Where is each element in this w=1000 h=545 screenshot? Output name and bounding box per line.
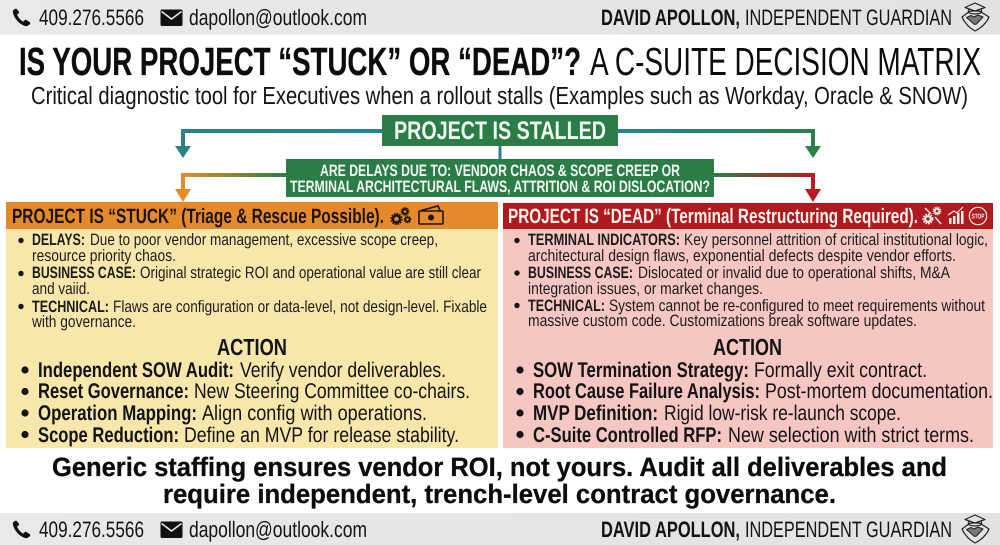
dead action list: MVP Definition: — [533, 401, 658, 425]
icon: guardian handshake — [962, 3, 989, 31]
icon: gears — [391, 208, 411, 224]
footer icon: envelope — [160, 522, 182, 538]
dead action list — [516, 358, 993, 447]
stuck action list: Independent SOW Audit: — [38, 358, 234, 382]
dead diagnostic bullets: Dislocated or invalid due to operational shifts, M&A — [638, 264, 950, 282]
stuck diagnostic bullets: with governance. — [31, 313, 136, 331]
arrow: stalled to stuck branch — [175, 131, 382, 158]
decision box: question: TERMINAL ARCHITECTURAL FLAWS, ATTRITION & ROI DISLOCATION? — [290, 178, 710, 196]
footer phone number: 409.276.5566 — [39, 517, 144, 542]
stuck action list: Operation Mapping: — [38, 401, 197, 425]
header contact bar — [0, 0, 1000, 34]
decision box: project is stalled: PROJECT IS STALLED — [394, 117, 606, 145]
stuck action list — [21, 358, 470, 447]
author name: DAVID APOLLON, — [601, 5, 740, 30]
icon: stop sign — [969, 207, 987, 225]
icon: stop sign: STOP — [972, 214, 985, 220]
arrow: stalled to question connector — [498, 146, 502, 159]
closing statement — [52, 452, 947, 509]
stuck diagnostic bullets: and vaiid. — [32, 280, 90, 298]
stuck action list: Define an MVP for release stability. — [184, 423, 459, 447]
stuck diagnostic bullets: Original strategic ROI and operational value are still clear — [140, 264, 481, 282]
icon: declining chart — [948, 207, 964, 224]
dead diagnostic bullets — [514, 231, 988, 330]
stuck header band: PROJECT IS “STUCK” (Triage & Rescue Possible). — [12, 205, 384, 228]
arrow: stalled to dead branch — [618, 131, 821, 158]
title: IS YOUR PROJECT “STUCK” OR “DEAD”? — [19, 40, 581, 84]
stuck action list: Align config with operations. — [202, 401, 427, 425]
decision box: question: ARE DELAYS DUE TO: VENDOR CHAOS & SCOPE CREEP OR — [320, 162, 680, 180]
stuck diagnostic bullets: DELAYS: — [32, 231, 85, 249]
icon: envelope — [160, 10, 182, 26]
stuck action list: Verify vendor deliverables. — [240, 358, 446, 382]
icon: money — [419, 206, 443, 224]
stuck action heading: ACTION — [217, 334, 287, 360]
dead diagnostic bullets: integration issues, or market changes. — [528, 280, 763, 298]
dead diagnostic bullets: massive custom code. Customizations break software updates. — [528, 312, 917, 330]
stuck action list: New Steering Committee co-chairs. — [194, 379, 470, 403]
closing statement: require independent, trench-level contract governance. — [163, 479, 836, 509]
dead action list: C-Suite Controlled RFP: — [533, 423, 722, 447]
decision box: question — [286, 159, 714, 197]
panel: project is dead — [503, 203, 993, 448]
stuck diagnostic bullets — [18, 231, 487, 331]
stuck action list: Reset Governance: — [38, 379, 189, 403]
stuck diagnostic bullets: Flaws are configuration or data-level, not design-level. Fixable — [113, 298, 487, 316]
stuck diagnostic bullets: Due to poor vendor management, excessive scope creep, — [90, 231, 438, 249]
arrow: question to dead panel — [714, 175, 821, 202]
dead diagnostic bullets: TECHNICAL: — [528, 297, 605, 315]
stuck action list: Scope Reduction: — [38, 423, 179, 447]
dead action heading: ACTION — [713, 334, 782, 360]
dead action list: Formally exit contract. — [754, 358, 927, 382]
phone number: 409.276.5566 — [39, 5, 144, 30]
footer contact bar — [0, 513, 1000, 545]
panel: project is stuck — [6, 202, 498, 448]
icon: phone — [13, 9, 30, 26]
dead action list: SOW Termination Strategy: — [533, 358, 749, 382]
email address: dapollon@outlook.com — [189, 5, 367, 30]
dead diagnostic bullets: TERMINAL INDICATORS: — [528, 231, 680, 249]
footer author name: DAVID APOLLON, — [601, 517, 740, 542]
dead action list: Root Cause Failure Analysis: — [533, 379, 760, 403]
footer icon: phone — [13, 521, 30, 538]
arrow: question to stuck panel — [175, 175, 286, 202]
stuck diagnostic bullets: TECHNICAL: — [32, 298, 109, 316]
closing statement: Generic staffing ensures vendor ROI, not yours. Audit all deliverables and — [52, 452, 947, 482]
footer icon: guardian handshake — [962, 515, 989, 543]
icon: broken gears — [923, 207, 941, 224]
dead diagnostic bullets: BUSINESS CASE: — [528, 264, 633, 282]
stuck diagnostic bullets: BUSINESS CASE: — [32, 264, 136, 282]
dead action list: Rigid low-risk re-launch scope. — [664, 401, 901, 425]
stuck diagnostic bullets: resource priority chaos. — [32, 247, 176, 265]
footer email address: dapollon@outlook.com — [189, 517, 367, 542]
